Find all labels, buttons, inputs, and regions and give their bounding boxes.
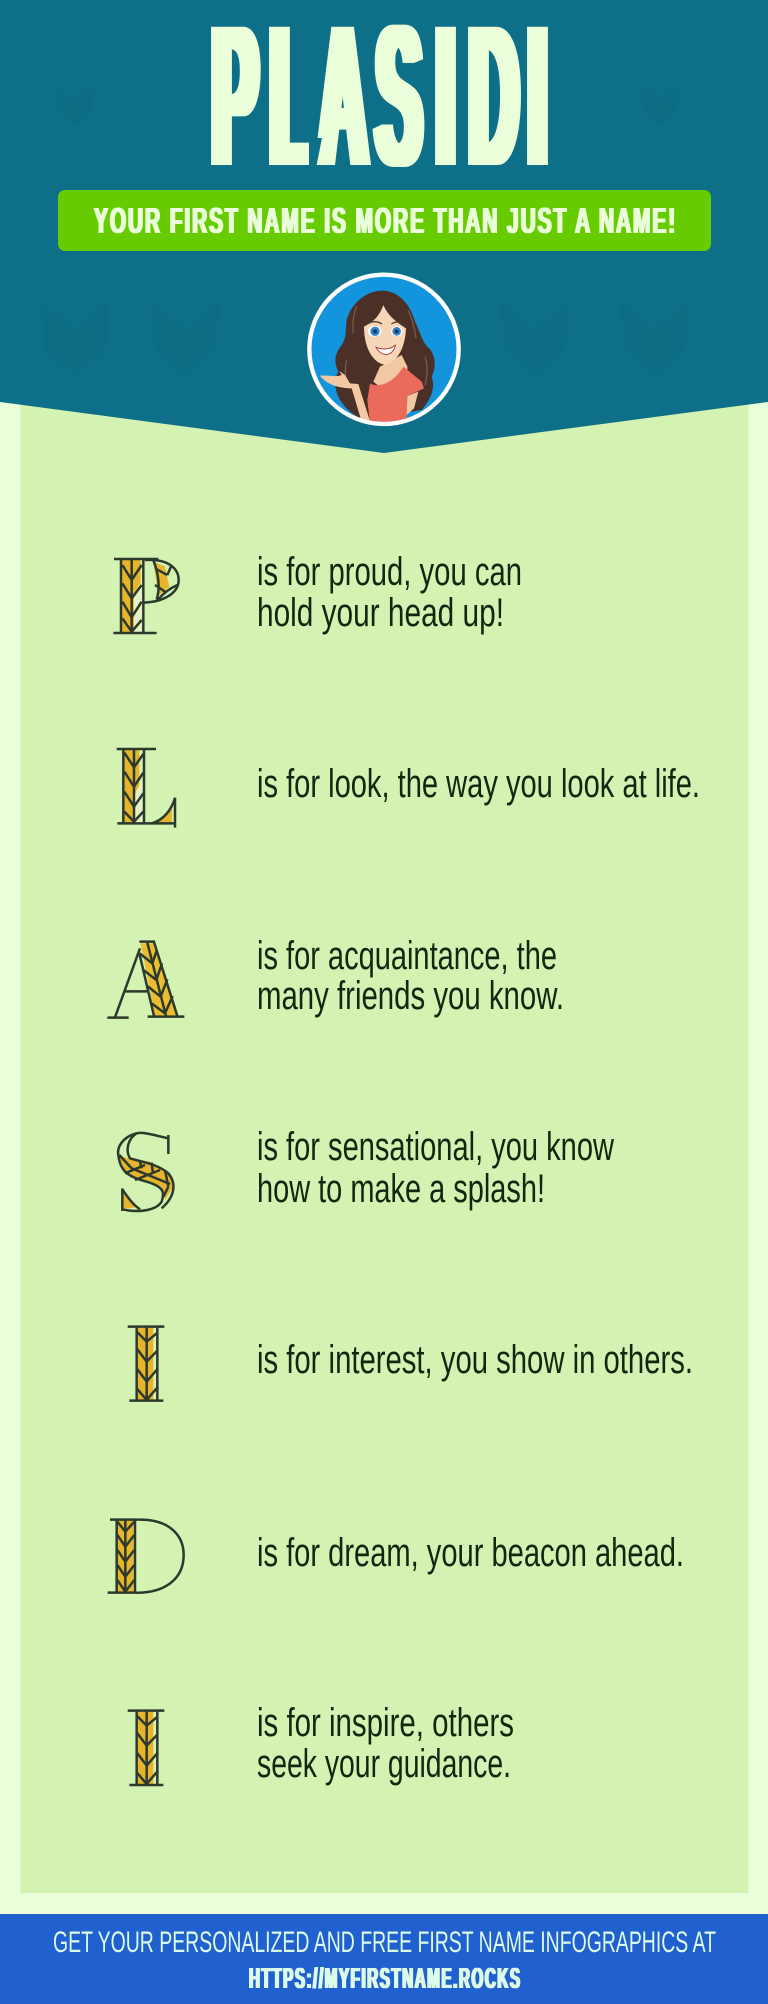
row: letter A	[107, 934, 564, 1018]
panel: letters background	[20, 380, 748, 1893]
footer url: HTTPS://MYFIRSTNAME.ROCKS	[249, 1962, 520, 1994]
text: S line: is for sensational, you know	[257, 1125, 614, 1169]
icon: letter L	[117, 749, 175, 828]
faint butterfly pattern	[40, 85, 690, 375]
text: A line	[257, 934, 564, 1018]
tagline bar: YOUR FIRST NAME IS MORE THAN JUST A NAME!	[94, 201, 675, 242]
row: letter P	[113, 550, 522, 635]
text: P line: hold your head up!	[257, 591, 504, 635]
footer	[0, 1914, 768, 2004]
icon: letter D	[108, 1520, 184, 1593]
icon: letter S	[118, 1133, 173, 1211]
title letter gap	[309, 138, 322, 168]
icon: letter A	[107, 942, 184, 1018]
text: second I line: seek your guidance.	[257, 1742, 511, 1786]
header banner	[0, 0, 768, 453]
row: second letter I	[128, 1701, 514, 1786]
text: P line	[257, 550, 522, 635]
text: second I line	[257, 1701, 514, 1786]
icon: letter P	[113, 559, 179, 633]
tagline bar	[58, 190, 711, 251]
text: S line	[257, 1125, 614, 1211]
text: S line: how to make a splash!	[257, 1167, 545, 1211]
row: letter L	[117, 749, 700, 828]
text: A line: many friends you know.	[257, 974, 564, 1018]
icon: woman avatar	[309, 275, 459, 424]
row: letter D	[108, 1520, 684, 1593]
row: letter I	[128, 1327, 693, 1401]
text: second I line: is for inspire, others	[257, 1701, 514, 1745]
text: A line: is for acquaintance, the	[257, 934, 557, 978]
icon: letter I	[128, 1327, 164, 1401]
row: letter S	[118, 1125, 614, 1211]
icon: second letter I	[128, 1711, 164, 1785]
text: P line: is for proud, you can	[257, 550, 522, 594]
